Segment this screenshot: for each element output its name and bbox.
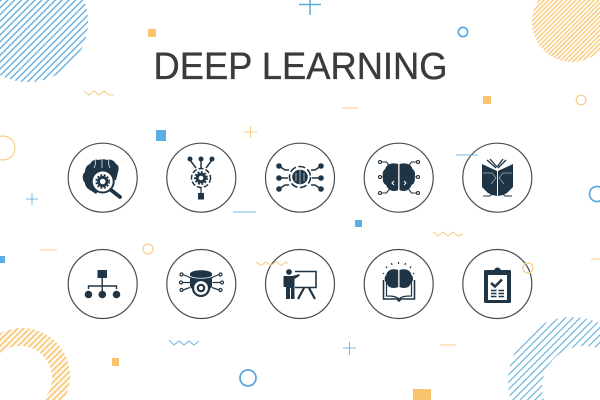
hatched ring bottom left [0, 328, 70, 400]
icon circle: hierarchy [68, 250, 137, 318]
icon circle: brain circuit [364, 143, 433, 212]
orange ring over clipboard circle [523, 263, 533, 273]
title: DEEP LEARNING [154, 46, 448, 88]
icon circle: presentation [266, 250, 334, 318]
icon circle: book with brain [364, 250, 433, 318]
hatched circle top right [532, 0, 600, 62]
icon circle: gear network [167, 143, 236, 212]
hatched circle top left [0, 0, 88, 82]
icon circle: clipboard checklist [463, 250, 532, 318]
hatched ring bottom right [508, 317, 600, 400]
blue dash over book icon circle [456, 154, 478, 156]
icon circle: brain book [463, 143, 532, 212]
icon circle: database gear [167, 250, 236, 318]
orange zigzag over icon [256, 262, 288, 266]
icon circle: brain search [68, 143, 137, 212]
icon circle: brain network [266, 143, 334, 212]
